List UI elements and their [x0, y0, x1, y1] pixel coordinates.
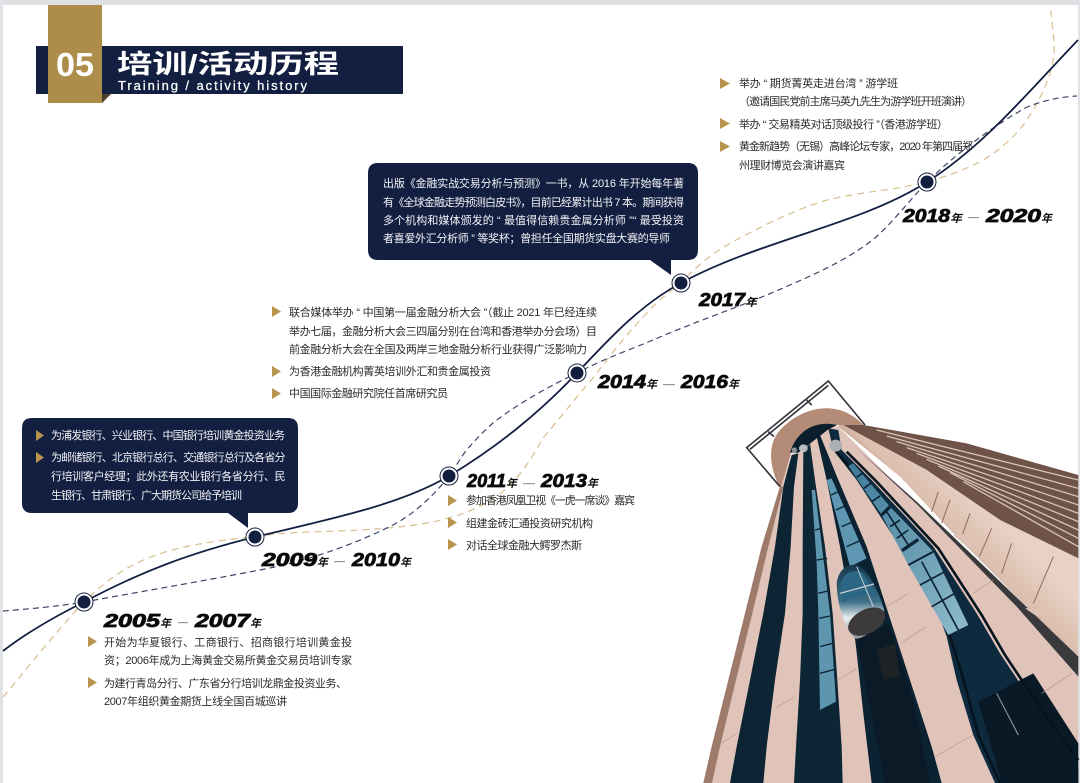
year label: 2005-2007: 年	[250, 617, 263, 630]
year label: 2017: 年	[745, 296, 759, 309]
callout: 2009-2010: 为浦发银行、兴业银行、中国银行培训黄金投资业务	[51, 428, 285, 442]
callout: 2017: 有《全球金融走势预测白皮书》，目前已经累计出书 7 本。期间获得	[383, 195, 684, 209]
callout: 2017	[368, 163, 698, 275]
text block: 2014-2016: 联合媒体举办 “ 中国第一届金融分析大会 ”（截止 2021 年已经连续	[289, 305, 597, 319]
node: 2009	[246, 528, 264, 546]
dark strip C	[817, 435, 942, 783]
node: 2011	[440, 467, 458, 485]
main timeline curve	[3, 40, 1078, 651]
year label: 2005-2007: 2005	[103, 611, 161, 631]
callout: 2017: 出版《金融实战交易分析与预测》一书，从 2016 年开始每年著	[383, 176, 684, 190]
subtitle: Training / activity history	[118, 78, 308, 93]
crown arc	[771, 408, 863, 487]
text block: 2018-2020: 黄金新趋势（无锡）高峰论坛专家，2020 年第四届郑	[739, 139, 973, 153]
year label: 2014-2016: 2016	[680, 372, 729, 392]
text block: 2018-2020: 州理财博览会演讲嘉宾	[739, 158, 845, 172]
year label: 2014-2016: 年	[646, 378, 659, 391]
dark strip A	[730, 453, 798, 783]
year label: 2018-2020: 2018	[902, 206, 950, 226]
year label: 2017	[698, 290, 759, 310]
node: 2018	[918, 173, 936, 191]
callout: 2017: 多个机构和媒体颁发的 “ 最值得信赖贵金属分析师 ”“ 最受投资	[383, 213, 684, 227]
header banner	[36, 5, 403, 103]
text block: 2018-2020: （邀请国民党前主席马英九先生为游学班开班演讲）	[739, 94, 972, 108]
year label: 2014-2016: 年	[728, 378, 741, 391]
left brown edge	[703, 487, 783, 783]
text block: 2011-2013: 对话全球金融大鳄罗杰斯	[466, 538, 582, 552]
section number: 05	[56, 46, 94, 83]
year label: 2018-2020: 年	[1041, 212, 1054, 225]
text block: 2014-2016: 中国国际金融研究院任首席研究员	[289, 386, 448, 400]
year label: 2011-2013: 年	[506, 477, 519, 490]
year label: 2014-2016: 2014	[597, 372, 646, 392]
year label: 2009-2010: 年	[317, 556, 330, 569]
node: 2005	[75, 593, 93, 611]
year label: 2005-2007: 2007	[194, 611, 251, 631]
year label: 2011-2013: 2011	[466, 471, 506, 491]
tower pink base	[703, 427, 1078, 783]
text block: 2014-2016: 举办七届，金融分析大会三四届分别在台湾和香港举办分会场）目	[289, 324, 597, 338]
elevator capsule	[837, 565, 884, 639]
text block: 2014-2016	[272, 305, 597, 400]
callout: 2009-2010	[22, 418, 298, 528]
windows strip C	[827, 478, 867, 567]
dark strip D	[828, 428, 1078, 783]
text block: 2005-2007: 2007年组织黄金期货上线全国百城巡讲	[104, 694, 287, 708]
year label: 2014-2016	[597, 372, 741, 392]
text block: 2018-2020	[720, 76, 973, 172]
text block: 2011-2013: 组建金砖汇通投资研究机构	[466, 516, 593, 530]
text block: 2011-2013	[448, 493, 635, 552]
title: 培训/活动历程	[117, 49, 339, 79]
text block: 2014-2016: 为香港金融机构菁英培训外汇和贵金属投资	[289, 364, 491, 378]
photo: skyscraper with glass elevator	[703, 381, 1078, 783]
node: 2014	[568, 364, 586, 382]
node: 2017	[672, 274, 690, 292]
callout: 2009-2010: 生银行、甘肃银行、广大期货公司给予培训	[51, 488, 242, 502]
year label: 2018-2020	[902, 206, 1054, 226]
year label: 2005-2007	[103, 611, 263, 631]
text block: 2005-2007: 开始为华夏银行、工商银行、招商银行培训黄金投	[104, 635, 352, 649]
windows strip B	[812, 490, 836, 710]
text block: 2018-2020: 举办 “ 期货菁英走进台湾 ” 游学班	[739, 76, 898, 90]
callout: 2017: 者喜爱外汇分析师 ” 等奖杯；曾担任全国期货实盘大赛的导师	[383, 231, 670, 245]
year label: 2009-2010: 年	[400, 556, 413, 569]
elevator shaft below capsule	[857, 623, 930, 783]
year label: 2017: 2017	[698, 290, 746, 310]
year label: 2005-2007: 年	[160, 617, 173, 630]
text block: 2005-2007: 为建行青岛分行、广东省分行培训龙鼎金投资业务、	[104, 676, 347, 690]
text block: 2005-2007	[88, 635, 352, 708]
text block: 2018-2020: 举办 “ 交易精英对话顶级投行 ”（香港游学班）	[739, 117, 948, 131]
year label: 2018-2020: 2020	[985, 206, 1041, 226]
year label: 2018-2020: 年	[950, 212, 964, 225]
cream band	[838, 423, 1078, 657]
year label: 2011-2013: 2013	[540, 471, 587, 491]
year label: 2011-2013	[466, 471, 600, 491]
year label: 2011-2013: 年	[587, 477, 600, 490]
callout: 2009-2010: 行培训客户经理；此外还有农业银行各省分行、民	[51, 469, 286, 483]
text block: 2005-2007: 资；2006年成为上海黄金交易所黄金交易员培训专家	[104, 653, 352, 667]
dark strip B	[794, 443, 843, 783]
windows strip D	[848, 463, 968, 635]
text block: 2014-2016: 前金融分析大会在全国及两岸三地金融分析行业获得广泛影响力	[289, 342, 587, 356]
year label: 2009-2010: 2009	[261, 550, 317, 570]
callout: 2009-2010: 为邮储银行、北京银行总行、交通银行总行及各省分	[51, 450, 286, 464]
navy dashed trend curve	[3, 96, 1077, 611]
text block: 2011-2013: 参加香港凤凰卫视《一虎一席谈》嘉宾	[466, 493, 635, 507]
year label: 2009-2010: 2010	[351, 550, 400, 570]
year label: 2009-2010	[261, 550, 413, 570]
